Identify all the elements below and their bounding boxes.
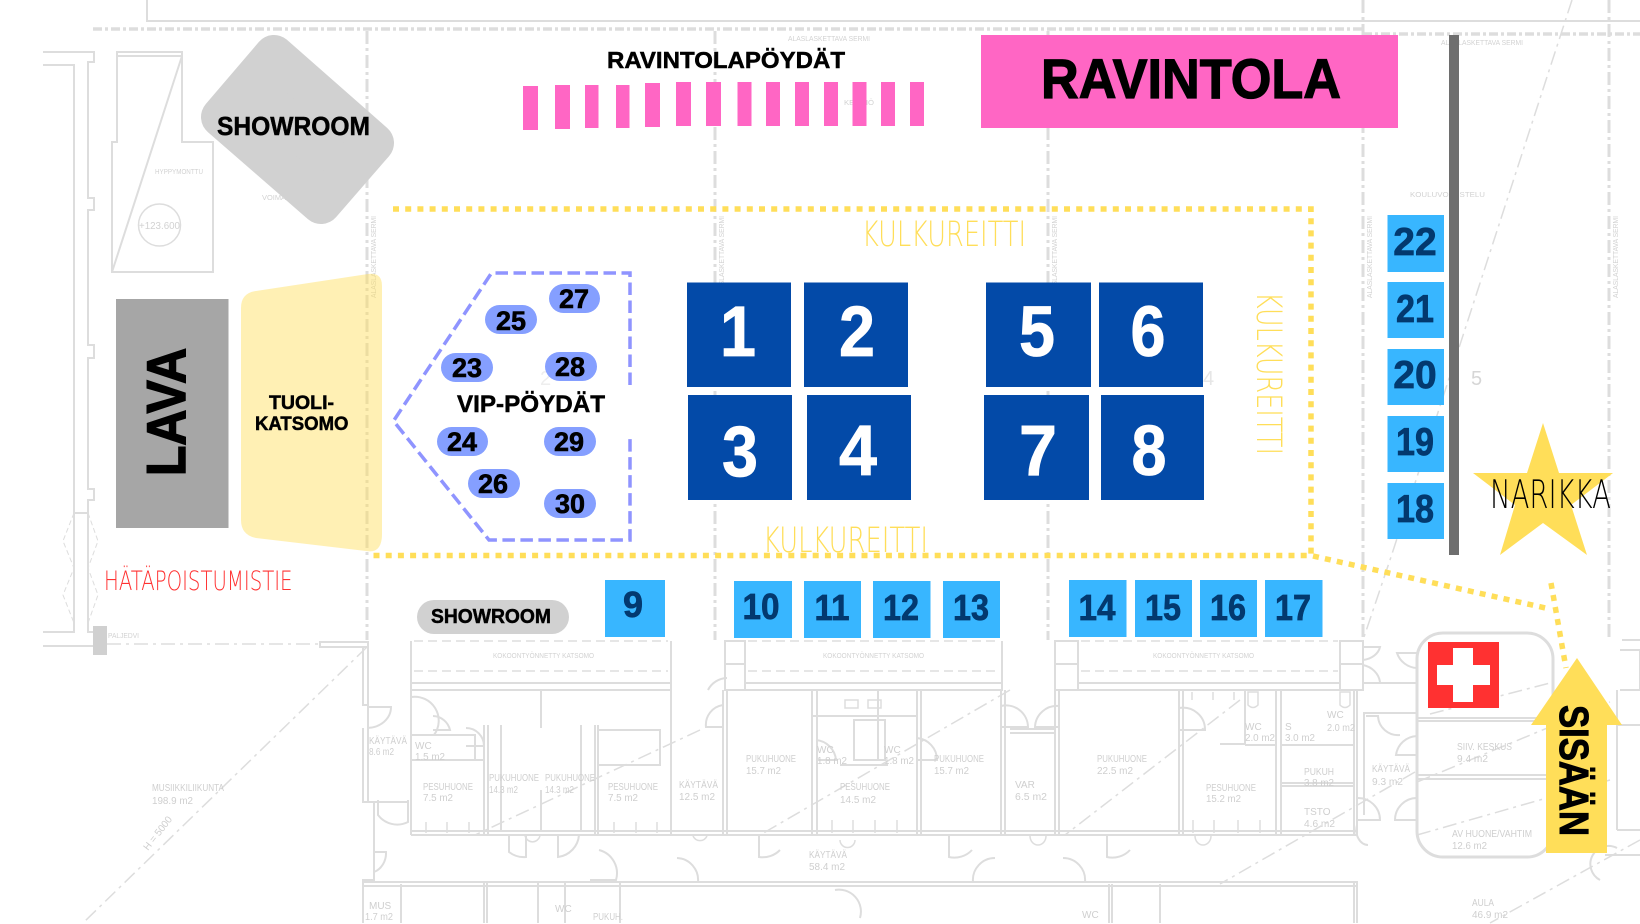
room labels: WC	[1082, 910, 1099, 921]
room labels: WC	[817, 745, 834, 756]
room labels: PALJEDVI	[108, 633, 139, 640]
booth 5	[986, 282, 1091, 387]
fixtures	[426, 692, 1260, 833]
room labels: PUKUHUONE	[545, 773, 595, 784]
room labels: PUKUHUONE	[934, 754, 984, 765]
room labels: 22.5 m2	[1097, 766, 1133, 777]
booth 3: 3	[722, 413, 758, 492]
VIP area outline	[394, 273, 630, 540]
entrance arrow	[1531, 658, 1622, 853]
room labels: 1.8 m2	[884, 756, 914, 767]
room labels: PUKUHUONE	[746, 754, 796, 765]
booth 15	[1135, 580, 1192, 637]
seating stand: TUOLI-	[269, 392, 334, 414]
room labels: KOKOONTYÖNNETTY KATSOMO	[823, 652, 925, 660]
showroom pill: SHOWROOM	[431, 606, 551, 628]
room labels: WC	[884, 745, 901, 756]
VIP table 24: 24	[447, 427, 477, 457]
room labels: 15.7 m2	[746, 766, 781, 777]
room labels: 2	[540, 368, 551, 390]
VIP table 27	[549, 284, 600, 314]
VIP table 25: 25	[496, 306, 526, 336]
booth 19: 19	[1396, 421, 1434, 464]
medical room	[1417, 633, 1553, 857]
room labels: KEITTIÖ	[844, 99, 875, 107]
room labels: ALASLASKETTAVA SERMI	[1441, 40, 1523, 47]
booth 10	[734, 581, 792, 638]
VIP table 26	[468, 469, 520, 499]
booth 2	[804, 282, 908, 387]
room labels: 4.6 m2	[1304, 819, 1335, 830]
room labels: HYPPYMONTTU	[155, 169, 203, 176]
room labels: WC	[1327, 710, 1344, 721]
room labels: 2.0 m2	[1245, 733, 1275, 744]
room labels: PUKUH.	[593, 912, 623, 923]
room labels: 1.7 m2	[365, 912, 393, 923]
booth 7	[984, 395, 1089, 500]
room labels: PUKUHUONE	[489, 773, 539, 784]
room labels: 14.3 m2	[545, 785, 574, 796]
room labels: KÄYTÄVÄ	[809, 849, 847, 861]
room labels: MUS	[369, 901, 392, 912]
booth 22: 22	[1393, 221, 1437, 264]
booth 9	[605, 580, 665, 637]
booth 8	[1101, 395, 1204, 500]
VIP table 27: 27	[559, 284, 589, 314]
VIP table 29: 29	[554, 427, 584, 457]
cloakroom star	[1473, 423, 1613, 555]
VIP table 28: 28	[555, 352, 585, 382]
room labels: KOKOONTYÖNNETTY KATSOMO	[493, 652, 595, 660]
room labels: 198.9 m2	[152, 796, 193, 807]
room labels: 1.8 m2	[817, 756, 847, 767]
room labels: 12.5 m2	[679, 792, 715, 803]
south rooms	[401, 882, 1160, 923]
room labels: 3.8 m2	[1304, 778, 1334, 789]
booth 18: 18	[1396, 488, 1434, 531]
booth 1	[687, 282, 791, 387]
room labels: H = 5000	[142, 814, 175, 853]
restaurant block	[981, 35, 1398, 128]
stage: LAVA	[135, 348, 197, 476]
restaurant block: RAVINTOLA	[1041, 47, 1341, 110]
VIP table 28	[545, 352, 597, 382]
walkway dotted route	[370, 209, 1566, 668]
room labels: ALASLASKETTAVA SERMI	[719, 216, 726, 298]
room labels: S	[1285, 722, 1292, 733]
room labels: 5	[1471, 368, 1482, 390]
room labels: KÄYTÄVÄ	[679, 779, 718, 791]
room labels: VAR	[1015, 780, 1035, 791]
room labels: WC	[415, 741, 432, 752]
booth 20: 20	[1393, 354, 1437, 397]
VIP table 30: 30	[555, 489, 585, 519]
seating stand	[241, 274, 382, 551]
booth 2: 2	[839, 293, 875, 372]
showroom pill	[417, 600, 569, 634]
booth 11	[804, 581, 861, 638]
entrance arrow: SISÄÄN	[1551, 705, 1597, 836]
room labels: ALASLASKETTAVA SERMI	[371, 216, 378, 298]
room labels: KOULUVOIMISTELU	[1410, 192, 1485, 199]
room labels: 1.5 m2	[415, 752, 445, 763]
walkway label top: KULKUREITTI	[862, 215, 1026, 255]
first aid cross	[1428, 642, 1499, 708]
VIP table 23	[441, 353, 493, 383]
room labels: 7.5 m2	[608, 793, 638, 804]
VIP table 26: 26	[478, 469, 508, 499]
booth 12	[873, 581, 930, 638]
booth 14	[1069, 580, 1126, 637]
booth 6	[1099, 282, 1203, 387]
room labels: 4	[1203, 368, 1214, 390]
doors	[367, 697, 617, 880]
booth 1: 1	[720, 293, 756, 372]
booth 17	[1265, 580, 1322, 637]
room labels: PESUHUONE	[1206, 783, 1256, 794]
VIP table 23: 23	[452, 353, 482, 383]
left wall	[43, 52, 94, 646]
room labels: MUSIIKKILIIKUNTA	[152, 783, 224, 794]
booth 5: 5	[1019, 293, 1055, 372]
room labels: 9.4 m2	[1457, 754, 1488, 765]
booth 22	[1388, 215, 1444, 272]
room labels: PESUHUONE	[840, 782, 890, 793]
room labels: PUKUH	[1304, 767, 1334, 778]
room labels: 8.6 m2	[369, 747, 394, 758]
booth 11: 11	[814, 587, 850, 628]
jump pit	[112, 52, 213, 272]
booth 4	[807, 395, 911, 500]
booth 9: 9	[623, 584, 643, 625]
VIP table 25	[485, 305, 537, 336]
room labels: +123.600	[139, 221, 180, 232]
main walls	[363, 647, 408, 923]
VIP table 29	[544, 427, 596, 457]
room labels: 3.0 m2	[1285, 733, 1315, 744]
room labels: ALASLASKETTAVA SERMI	[1367, 216, 1374, 298]
room labels: 58.4 m2	[809, 862, 845, 873]
pillar	[93, 626, 107, 655]
room labels: 2.0 m2	[1327, 723, 1355, 734]
booth 21: 21	[1396, 288, 1434, 331]
room labels: 7.5 m2	[423, 793, 453, 804]
VIP table 30	[544, 489, 596, 519]
emergency exit label: HÄTÄPOISTUMISTIE	[104, 565, 292, 597]
room labels: PESUHUONE	[608, 782, 658, 793]
room labels: 9.3 m2	[1372, 777, 1403, 788]
room labels: ALASLASKETTAVA SERMI	[1052, 216, 1059, 298]
booth 12: 12	[883, 587, 919, 628]
booth 16: 16	[1210, 587, 1246, 628]
room labels: WC	[1245, 722, 1262, 733]
booth 13	[943, 581, 1000, 638]
room labels: 14.5 m2	[840, 795, 876, 806]
VIP table 24	[437, 427, 488, 457]
showroom diamond: SHOWROOM	[217, 111, 370, 141]
VIP heading: VIP-PÖYDÄT	[457, 391, 605, 418]
coat rack wall	[1449, 35, 1459, 555]
room labels: KÄYTÄVÄ	[1372, 763, 1410, 775]
booth 14: 14	[1078, 587, 1116, 628]
room labels: 6.5 m2	[1015, 792, 1047, 803]
booth 16	[1200, 580, 1257, 637]
room labels: AULA	[1472, 898, 1494, 909]
stage	[116, 299, 228, 528]
room labels: KOKOONTYÖNNETTY KATSOMO	[1153, 652, 1255, 660]
room labels: 12.6 m2	[1452, 841, 1487, 852]
restaurant table bars	[523, 82, 924, 130]
booth 19	[1388, 416, 1444, 472]
room labels: 14.3 m2	[489, 785, 518, 796]
seating stand: KATSOMO	[255, 413, 348, 435]
booth 15: 15	[1145, 587, 1181, 628]
booth 8: 8	[1132, 412, 1166, 491]
room labels: WC	[555, 904, 572, 915]
booth 21	[1388, 282, 1444, 338]
booth 20	[1388, 349, 1444, 405]
booth 7: 7	[1019, 412, 1057, 491]
room labels: AV HUONE/VAHTIM	[1452, 829, 1532, 840]
room labels: KÄYTÄVÄ	[369, 735, 407, 747]
room labels: PUKUHUONE	[1097, 754, 1147, 765]
booth 6: 6	[1130, 293, 1166, 372]
room labels: ALASLASKETTAVA SERMI	[1613, 216, 1620, 298]
room labels: SIIV. KESKUS	[1457, 742, 1512, 753]
room labels: PESUHUONE	[423, 782, 473, 793]
booth 17: 17	[1275, 587, 1311, 628]
showroom diamond	[217, 55, 374, 204]
walkway label bottom: KULKUREITTI	[763, 521, 928, 561]
room labels: ALASLASKETTAVA SERMI	[788, 36, 870, 43]
booth 10: 10	[742, 586, 780, 627]
room labels: 15.7 m2	[934, 766, 969, 777]
room labels: VOIMA	[262, 195, 286, 202]
booth 18	[1388, 483, 1444, 539]
booth 4: 4	[839, 412, 877, 491]
walkway label right: KULKUREITTI	[1248, 292, 1288, 455]
booth 3	[688, 395, 792, 500]
booth 13: 13	[953, 587, 989, 628]
room labels: TSTO	[1304, 807, 1331, 818]
restaurant tables heading: RAVINTOLAPÖYDÄT	[607, 47, 845, 73]
room labels: 46.9 m2	[1472, 910, 1508, 921]
room labels: 15.2 m2	[1206, 794, 1241, 805]
